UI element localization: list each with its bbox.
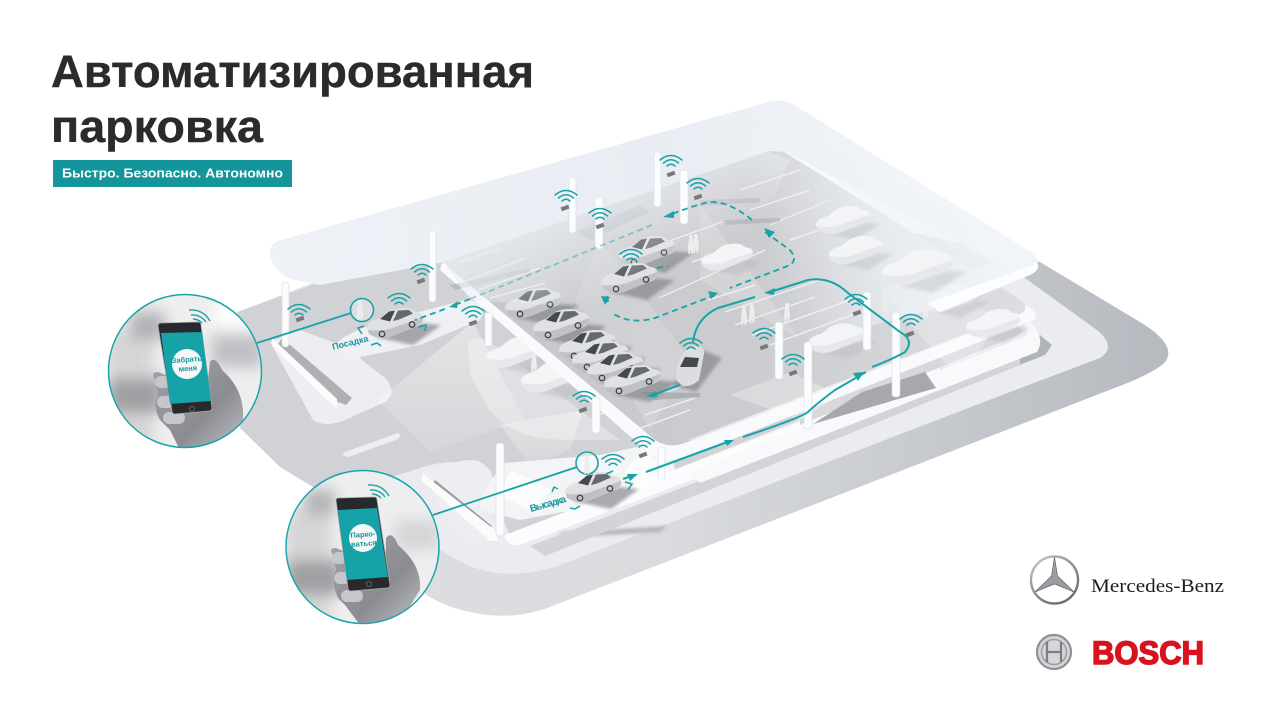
phone screen xyxy=(161,332,211,404)
right slab shadow xyxy=(880,335,1052,420)
car: drop-off xyxy=(565,472,639,509)
second deck interior xyxy=(800,318,1024,425)
phone home button xyxy=(366,582,372,586)
road surface xyxy=(237,170,1000,535)
ghost cars upper deck xyxy=(701,244,1031,359)
wifi signals xyxy=(288,156,922,465)
title: Автоматизированная xyxy=(51,46,534,97)
drop-off lane xyxy=(480,440,675,520)
phone body xyxy=(158,322,212,414)
parking scene base xyxy=(170,165,1168,616)
screen button: меня xyxy=(178,363,197,374)
screen button xyxy=(349,524,377,552)
dashed route arrowheads xyxy=(449,211,775,308)
dark shadow at pillar xyxy=(640,392,700,400)
phone signal xyxy=(189,310,210,323)
screen button: ваться xyxy=(351,538,377,549)
subtitle banner: Быстро. Безопасно. Автономно xyxy=(62,166,283,180)
callout lines xyxy=(257,313,577,515)
moving car xyxy=(672,346,722,392)
pillars xyxy=(282,152,900,536)
lower parking lines xyxy=(600,398,670,428)
logo: Bosch xyxy=(1037,635,1204,671)
people xyxy=(531,234,790,372)
parking lines xyxy=(460,170,990,440)
label: Высадка: Высадка xyxy=(529,494,568,515)
solid route xyxy=(623,279,909,479)
roof back band xyxy=(270,101,1038,285)
ghost cars under roof xyxy=(816,206,966,293)
phone signal xyxy=(368,485,389,498)
hand xyxy=(153,360,243,450)
pick-up curb wall xyxy=(272,338,337,408)
roof front edge xyxy=(928,262,1038,312)
fingers xyxy=(155,376,185,424)
solid route arrowheads xyxy=(627,288,864,481)
screen button xyxy=(171,349,203,379)
label: Посадка xyxy=(331,325,426,352)
car: pick-up xyxy=(367,308,441,345)
logo: Mercedes-Benz xyxy=(1031,556,1224,604)
subtitle banner xyxy=(53,160,292,187)
blurred backdrop xyxy=(109,304,260,440)
inner light slab xyxy=(360,260,1108,574)
parked cars xyxy=(505,236,693,402)
title second line: парковка xyxy=(51,101,264,152)
fingers xyxy=(332,552,363,602)
lower floor light area xyxy=(468,338,620,440)
roof fade right xyxy=(680,120,1035,345)
ramp shadow xyxy=(813,372,936,424)
outer ground slab xyxy=(170,165,1168,616)
pick-up curb shade xyxy=(278,338,352,405)
road marking xyxy=(343,433,400,457)
upper deck xyxy=(440,150,1036,460)
screen button: Парко- xyxy=(350,529,376,540)
logo: Bosch: BOSCH xyxy=(1092,635,1204,671)
ghost cars lower level xyxy=(486,337,558,374)
label: Посадка: Посадка xyxy=(331,333,370,352)
deck rim xyxy=(440,151,1036,460)
pick-up island xyxy=(270,330,392,424)
pin: drop-off person xyxy=(576,452,598,474)
shadow under wall xyxy=(557,526,667,537)
drop-off island xyxy=(422,460,500,545)
deck light patches xyxy=(575,240,690,430)
phone body xyxy=(336,497,390,591)
people under roof xyxy=(882,293,929,317)
rear pillar shadows xyxy=(450,198,780,290)
pick-up lane xyxy=(333,300,483,360)
deck floor xyxy=(444,150,1026,445)
screen button: Забрать xyxy=(171,354,203,365)
roof canopy xyxy=(270,101,1038,345)
dashed route: park-out xyxy=(415,202,794,321)
label: Высадка xyxy=(529,471,632,515)
second deck rim xyxy=(690,322,1040,483)
pin: pick-up person xyxy=(350,298,374,322)
logo: Mercedes-Benz: Mercedes-Benz xyxy=(1091,576,1224,597)
drop-off curb shade xyxy=(432,480,492,530)
front wall xyxy=(505,368,940,545)
blurred backdrop xyxy=(286,490,440,620)
roof fade left xyxy=(444,151,790,310)
cameras xyxy=(296,171,914,458)
phone screen xyxy=(338,508,388,580)
drop-off curb wall xyxy=(422,473,498,541)
phone callout: park xyxy=(286,470,440,625)
hand xyxy=(331,535,420,625)
front wall band xyxy=(530,358,1020,556)
phone callout: pick-up xyxy=(108,294,265,450)
light cones lower xyxy=(378,322,525,452)
phone home button xyxy=(190,406,194,412)
